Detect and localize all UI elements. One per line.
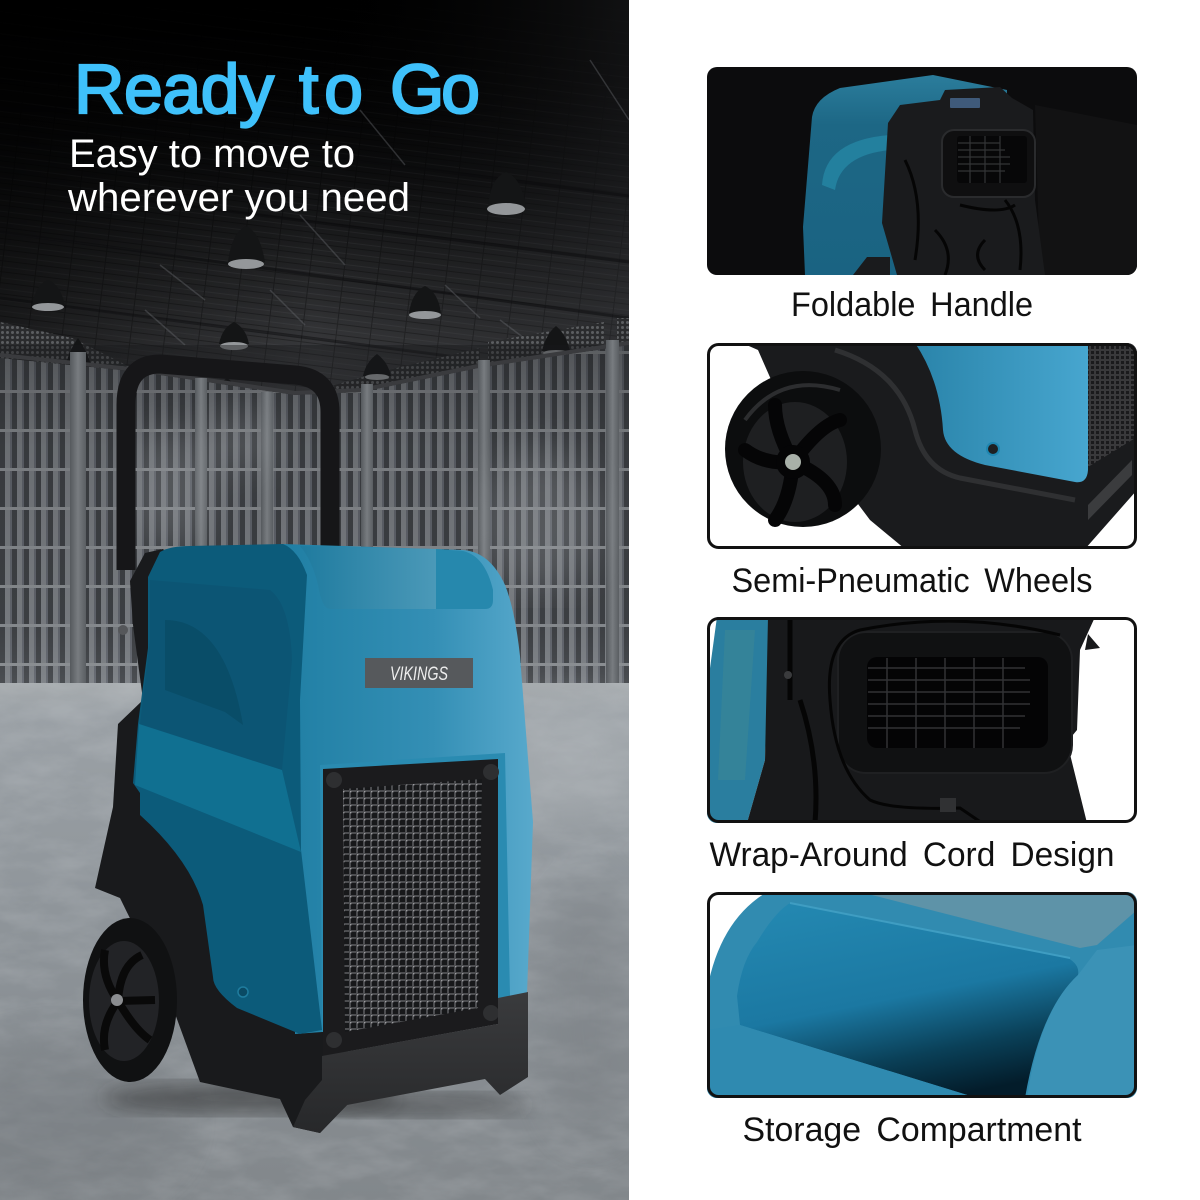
logo plate (365, 658, 473, 688)
blue side (707, 617, 770, 823)
warehouse wall (0, 340, 629, 687)
title (74, 50, 480, 128)
side mesh (1088, 343, 1137, 467)
panel border: cord design (708, 618, 1136, 822)
control display (950, 98, 980, 108)
wheel arch (853, 257, 890, 275)
dehumidifier product (83, 364, 533, 1133)
caption: foldable handle: Foldable Handle (791, 286, 1033, 324)
cord clip (940, 798, 956, 812)
panel: storage compartment (707, 892, 1137, 1098)
subtitle: wherever you need (67, 176, 410, 220)
side grip recess (165, 620, 243, 725)
arch highlight (835, 350, 1075, 500)
blue unit side (803, 75, 1007, 275)
panel border: wheels (708, 344, 1136, 548)
base slot (1088, 460, 1132, 520)
concrete floor (0, 683, 640, 1200)
wheel (725, 371, 881, 527)
compartment interior (737, 903, 1078, 1098)
wrap-around cord (829, 621, 1060, 823)
title: Go (390, 50, 480, 128)
telescoping handle (126, 364, 330, 570)
side port (238, 987, 248, 997)
title: Ready (74, 50, 274, 128)
subtitle: Easy to move to (69, 132, 355, 176)
blue rim (707, 892, 1137, 1098)
vent housing (838, 632, 1072, 773)
clip notch (1085, 634, 1100, 650)
left frame detail (790, 617, 816, 823)
interior rim highlight (790, 903, 1070, 958)
top storage recess (300, 546, 493, 609)
handle bolt (118, 625, 128, 635)
blue grip recess (822, 135, 890, 190)
panel: wheels (707, 343, 1137, 549)
black chassis (742, 343, 1137, 549)
front lip (707, 1038, 967, 1098)
black rear panel (882, 87, 1045, 275)
side blue housing (133, 544, 322, 1034)
front blue housing (283, 544, 533, 1034)
rear wheel (83, 918, 177, 1082)
panel: cord design (707, 617, 1137, 823)
ceiling lights (32, 177, 570, 382)
wrapped cord (905, 160, 1021, 275)
side lighter band (135, 724, 301, 852)
black base (293, 992, 528, 1133)
title: to (299, 50, 363, 128)
logo plate: VIKINGS (390, 664, 448, 685)
panel: warehouse scene (0, 0, 640, 1200)
top surface (860, 892, 1137, 948)
warehouse ceiling (0, 0, 629, 400)
blue housing (915, 343, 1088, 482)
side upper panel (140, 580, 292, 770)
perforated ceiling edge (0, 318, 629, 389)
caption: storage compartment: Storage Compartment (742, 1111, 1082, 1149)
rear black frame and wheel arch (95, 549, 347, 1133)
caption: wheels: Semi-Pneumatic Wheels (732, 562, 1092, 600)
subtitle (67, 132, 410, 220)
black rear (747, 617, 1095, 823)
panel border: storage compartment (708, 894, 1136, 1096)
front vent grille (320, 753, 510, 1056)
background sheen (1128, 265, 1137, 275)
caption: cord design: Wrap-Around Cord Design (710, 836, 1114, 874)
rear vent (942, 130, 1035, 197)
right housing (1027, 945, 1137, 1098)
panel: foldable handle (707, 67, 1137, 275)
